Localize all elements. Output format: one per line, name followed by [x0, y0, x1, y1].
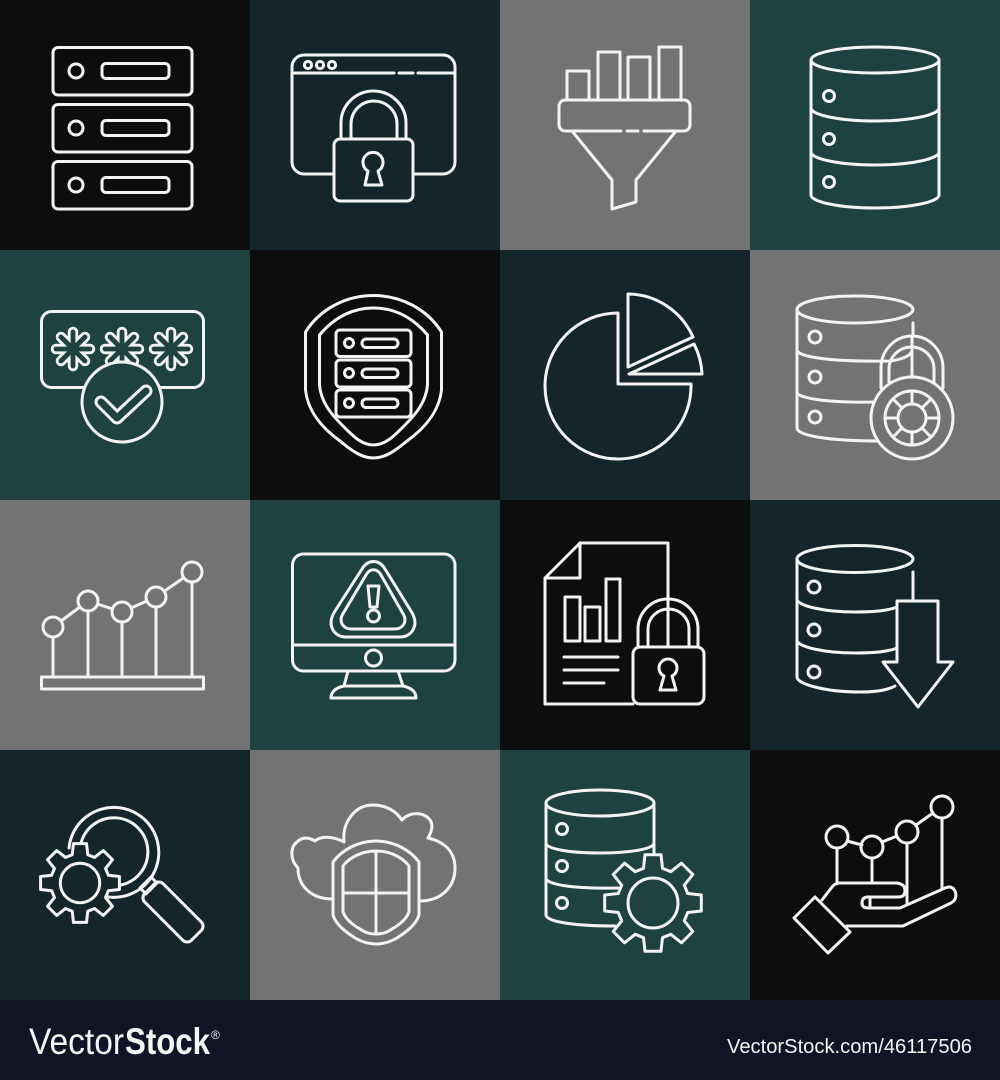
tile: row 1 column 3 [500, 0, 750, 250]
logo: VectorStock: Vector [29, 1021, 124, 1062]
icon: hand holding line chart [794, 796, 956, 953]
tile: row 2 column 3 [500, 250, 750, 500]
icon: database with combination lock [797, 296, 953, 459]
icon: database with download arrow [797, 546, 953, 707]
tile: row 3 column 4 [750, 500, 1000, 750]
icon: monitor with warning triangle [292, 554, 455, 698]
icon: password with check mark [42, 312, 204, 442]
tile: row 3 column 3 [500, 500, 750, 750]
tile: row 1 column 2 [250, 0, 500, 250]
tile: row 1 column 4 [750, 0, 1000, 250]
tile: row 4 column 4 [750, 750, 1000, 1000]
logo: VectorStock: Stock [125, 1021, 210, 1062]
tile: row 2 column 1 [0, 250, 250, 500]
icon: browser window with padlock [292, 55, 455, 201]
icon: funnel filtering bars [559, 47, 690, 209]
tile: row 4 column 2 [250, 750, 500, 1000]
icon: report document with padlock [545, 543, 704, 704]
icon: server stack [53, 48, 192, 209]
icon: database cylinder [811, 47, 939, 208]
logo: VectorStock [29, 1021, 220, 1062]
icon: gear with magnifying glass [41, 807, 206, 945]
icon: pie chart [545, 294, 702, 459]
icon: database with gear [546, 790, 701, 951]
tile: row 3 column 1 [0, 500, 250, 750]
tile: row 2 column 4 [750, 250, 1000, 500]
icon: cloud with shield [292, 805, 455, 944]
tile: row 4 column 1 [0, 750, 250, 1000]
footer bar [0, 1000, 1000, 1080]
tile: row 4 column 3 [500, 750, 750, 1000]
icon: shield with servers [306, 296, 442, 458]
tile: row 3 column 2 [250, 500, 500, 750]
text: image reference: VectorStock.com/46117506 [727, 1036, 972, 1058]
tile: row 2 column 2 [250, 250, 500, 500]
logo: VectorStock: ® [211, 1028, 220, 1042]
tile: row 1 column 1 [0, 0, 250, 250]
icon: line chart with data points [42, 562, 204, 689]
